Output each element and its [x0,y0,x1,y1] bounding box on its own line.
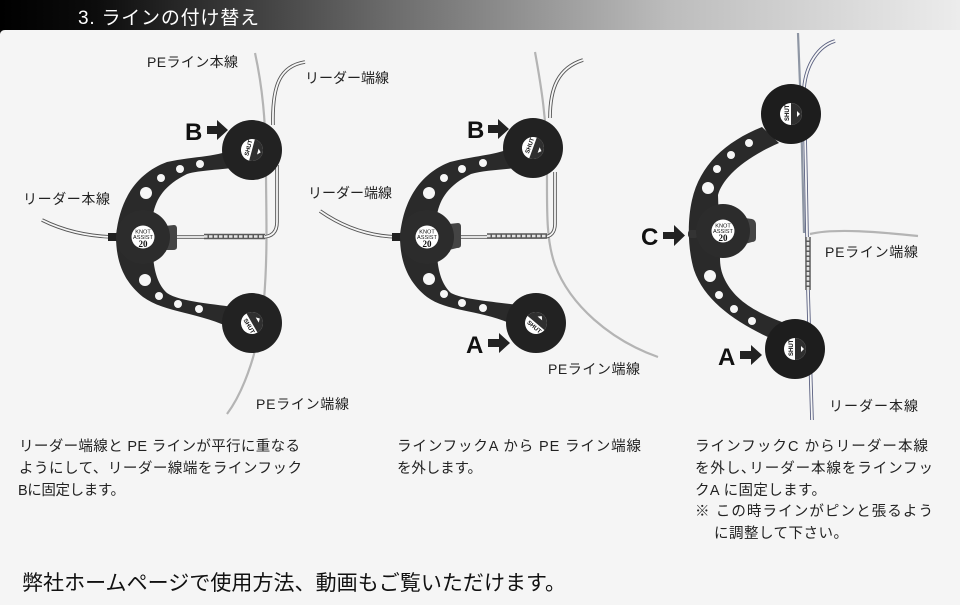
hook body [400,145,524,328]
labels diagram 2: PEライン端線 [548,361,640,377]
header bar [0,0,960,34]
marker A [718,344,762,371]
marker C [641,224,685,251]
release tab [745,218,756,244]
instruction text 1: ようにして、リーダー線端をラインフック [19,460,302,477]
leader line [42,62,305,237]
instruction text 2 [397,438,642,477]
leader stopper [392,233,402,241]
footer note: 弊社ホームページで使用方法、動画もご覧いただけます。 [22,572,566,595]
instruction text 3: クA に固定します。 [695,482,826,499]
PE tag end [810,231,918,236]
knot assist disc: 20 [422,239,432,249]
release tab [449,223,461,250]
PE line [227,53,266,414]
PE line [535,52,658,357]
PE line [798,33,804,233]
hook disc A: SHUT [525,320,542,335]
line twist [805,237,811,290]
instruction text 1: リーダー端線と PE ラインが平行に重なる [19,438,300,455]
labels diagram 3 [825,244,918,414]
release tab [165,225,177,250]
hook disc A [506,293,566,353]
hook body [689,127,782,338]
labels diagram 1: PEライン本線 [147,54,238,70]
marker B [185,119,228,146]
labels diagram 2 [308,185,640,377]
hook disc A [765,319,825,379]
hook body [116,148,240,330]
knot assist disc: KNOT [715,224,731,230]
knot assist disc [400,210,454,264]
knot assist disc: ASSIST [713,229,734,235]
instruction text 2: を外します。 [397,460,482,477]
instruction text 3: ラインフックC からリーダー本線 [695,438,928,455]
diagram 3: leader main line fixed to hook A [641,33,918,420]
instruction text 1 [18,438,302,499]
knot assist disc: ASSIST [417,235,438,241]
hook disc B [222,120,282,180]
labels diagram 1: リーダー端線 [305,70,389,86]
hook disc A: SHUT [789,339,795,356]
marker A: A [718,344,735,371]
instruction text 3: に調整して下さい。 [714,525,848,542]
diagram 1: leader tip fixed to hook B [42,53,305,414]
labels diagram 3: PEライン端線 [825,244,918,260]
marker C: C [641,224,658,251]
leader line [320,60,583,237]
line twist [204,234,265,239]
hook disc top: SHUT [785,104,791,121]
marker A [466,332,510,359]
knot assist disc: 20 [718,233,728,243]
hook disc B: SHUT [525,137,536,155]
knot assist disc [696,204,750,258]
leader stopper [688,230,698,238]
hook disc A [222,293,282,353]
knot assist disc: ASSIST [133,235,154,241]
instruction text 3: ※ この時ラインがピンと張るよう [695,503,933,520]
hook disc A: SHUT [242,318,255,335]
knot assist disc: 20 [138,239,148,249]
leader stopper [108,233,118,241]
instruction text 3: を外し､リーダー本線をラインフッ [695,460,933,477]
hook disc top [761,84,821,144]
knot assist disc: KNOT [135,230,151,236]
marker A: A [466,332,483,359]
diagram 2: PE tag end released from hook A [320,52,658,359]
knot assist disc: KNOT [419,230,435,236]
line twist [487,233,547,239]
labels diagram 2: リーダー端線 [308,185,392,201]
leader line [804,41,835,420]
hook disc B [503,118,563,178]
marker B [467,117,509,144]
section title: 3. ラインの付け替え [78,7,259,29]
hook disc B: SHUT [244,139,255,157]
instruction text 2: ラインフックA から PE ライン端線 [397,438,642,455]
instruction text 3 [695,438,933,542]
marker B: B [185,119,202,146]
labels diagram 1: PEライン端線 [256,396,349,412]
labels diagram 1 [23,54,389,412]
marker B: B [467,117,484,144]
instruction text 1: Bに固定します。 [18,482,125,499]
labels diagram 3: リーダー本線 [829,398,918,414]
labels diagram 1: リーダー本線 [23,191,110,207]
knot assist disc [116,210,170,264]
